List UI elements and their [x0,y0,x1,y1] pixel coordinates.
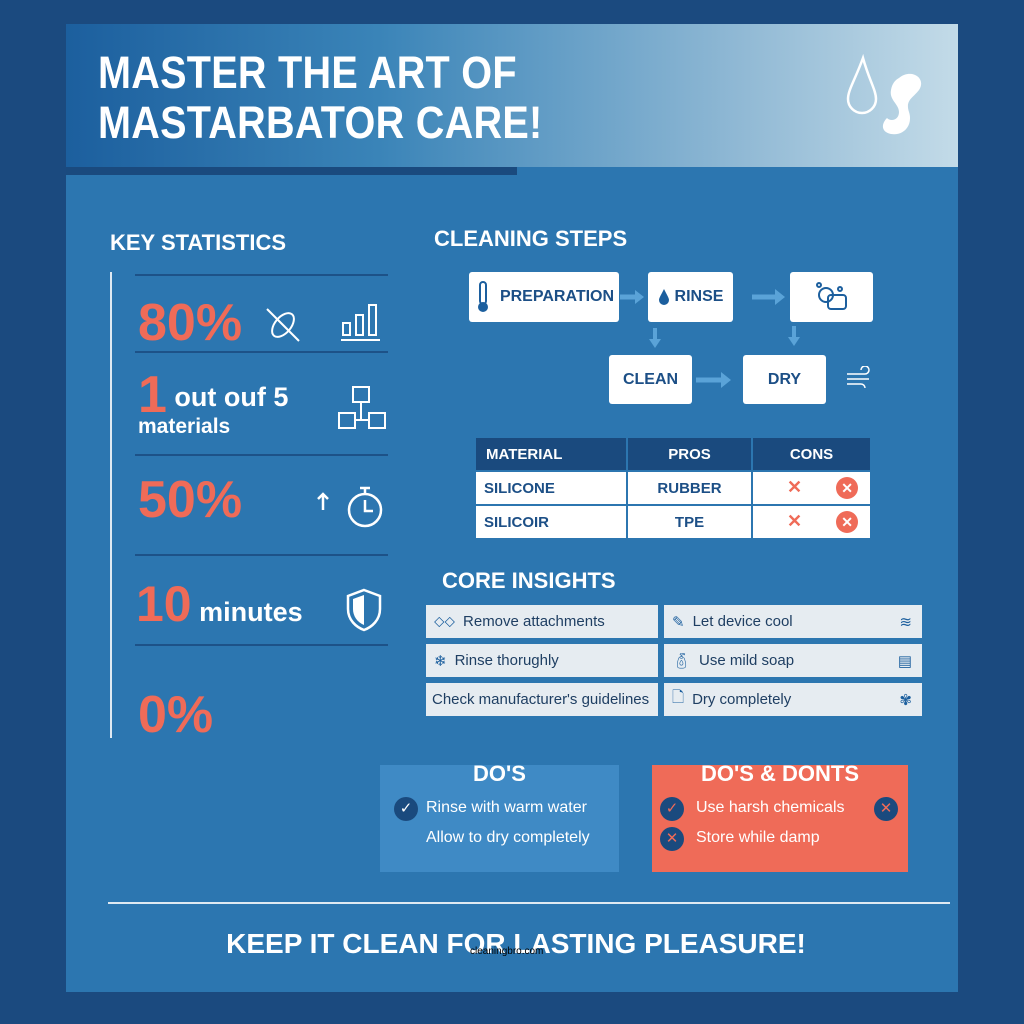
table: materials: ✕ [841,514,853,530]
panel: core insights: Rinse thorughly [455,652,559,669]
icon: stopwatch with arrow [317,486,382,528]
header banner [66,24,958,167]
panel: do's: ✓ [400,800,412,817]
title [98,47,542,148]
step: clean: CLEAN [623,370,678,388]
table: materials: PROS [668,446,711,462]
step: clean [609,355,692,404]
stat: 0%: 0% [138,686,213,744]
panel: core insights: ✾ [899,692,912,708]
step: soap [790,272,873,322]
table: materials: MATERIAL [486,446,562,462]
watermark: cleaningbro.com [470,946,543,957]
panel: core insights: ≋ [899,614,912,630]
table: materials: TPE [675,514,704,530]
table: materials: SILICOIR [484,514,549,530]
table: materials [476,438,870,538]
panel: core insights: 🗋 [672,689,684,706]
panel: core insights: Dry completely [692,691,791,708]
panel: core insights: ❄ [434,652,447,670]
title: MASTARBATOR CARE! [98,97,542,148]
panel: core insights: ✎ [672,614,685,630]
table: materials: ✕ [841,480,853,496]
panel: do's [380,765,619,872]
heading: core insights: CORE INSIGHTS [442,568,616,593]
panel: do's: DO'S [473,761,526,786]
flowchart: cleaning steps [469,272,873,404]
step: dry [743,355,826,404]
panel: do's & donts [652,765,908,872]
panel: do's: Rinse with warm water [426,799,587,816]
panel: do's: Allow to dry completely [426,829,590,846]
panel: do's & donts: ✕ [880,800,892,817]
panel: do's & donts: Use harsh chemicals [696,799,844,816]
step: dry: DRY [768,370,801,388]
stat: 10 minutes: 10 minutes [136,576,303,632]
panel: core insights: 🧴︎ [672,652,691,670]
stat: 50%: 50% [138,471,242,529]
step: rinse [648,272,733,322]
panel: key statistics [110,230,388,744]
stat: 1 out of 5: materials [138,415,230,438]
panel: core insights: Remove attachments [463,613,605,630]
icon: no bacteria [266,308,300,342]
step: preparation [469,272,619,322]
stat: 80%: 80% [138,294,242,352]
panel: do's & donts: ✕ [666,830,678,847]
table: materials: SILICONE [484,480,555,496]
table: materials: ✕ [787,511,802,531]
heading: key statistics: KEY STATISTICS [110,230,286,255]
arrows [620,289,800,388]
table: materials: CONS [790,446,833,462]
panel: do's & donts: Store while damp [696,829,820,846]
icon: hierarchy [338,386,386,429]
panel: core insights: Let device cool [693,613,793,630]
panel: core insights: ▤ [898,652,912,670]
step: preparation: PREPARATION [500,288,614,305]
footer slogan: KEEP IT CLEAN FOR LASTING PLEASURE! [226,928,806,959]
panel: do's & donts: DO'S & DONTS [701,761,859,786]
panel: core insights: ⬦⬦ [434,613,455,630]
icon: water drop and swirl [846,54,922,134]
icon: shield [346,588,382,632]
step: rinse: RINSE [675,288,723,305]
stat: 1 out of 5: 1 out ouf 5 [138,366,288,424]
icon: wind [847,366,870,388]
panel: do's & donts: ✓ [666,800,678,817]
heading: cleaning steps: CLEANING STEPS [434,226,627,251]
panel: core insights: Check manufacturer's guidelines [432,691,649,708]
header underline bar [66,167,517,175]
icon: bar chart [341,304,380,341]
panel: core insights [426,605,922,716]
table: materials: RUBBER [657,480,722,496]
title: MASTER THE ART OF [98,47,517,98]
panel: core insights: Use mild soap [699,652,794,669]
table: materials: ✕ [787,477,802,497]
